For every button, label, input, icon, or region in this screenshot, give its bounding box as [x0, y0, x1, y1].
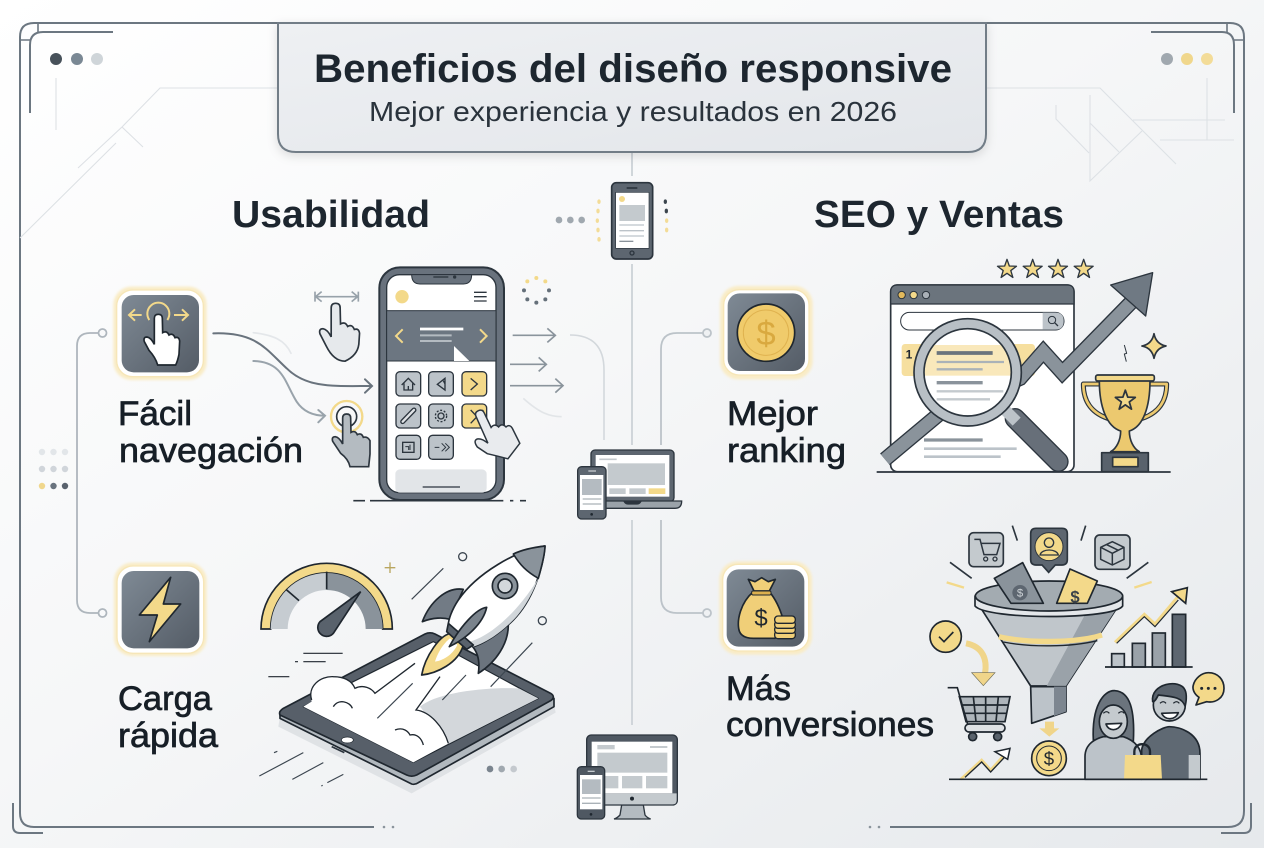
icon: top phone [556, 183, 668, 259]
connector: right bracket [661, 329, 711, 617]
coin output: $ [1044, 748, 1055, 769]
banknotes [994, 563, 1097, 607]
dot grid: left margin [39, 449, 68, 489]
label: Fácil navegación [118, 395, 303, 470]
arrows: out of phone [510, 328, 563, 417]
tablet [278, 633, 556, 793]
icon: touch navigation tile [113, 287, 207, 380]
coin output [1032, 722, 1066, 776]
label: Fácil navegación: Fácil [118, 395, 192, 433]
growth arrow [885, 273, 1153, 459]
ground line [877, 469, 1171, 474]
icon: money bag tile [719, 561, 812, 655]
banknotes: $ [1070, 588, 1080, 607]
ground line [949, 777, 1207, 782]
label: Mejor ranking [727, 395, 846, 470]
label: Fácil navegación: navegación [119, 432, 303, 470]
shopping cart [948, 688, 1010, 741]
icon: coin tile [720, 286, 813, 379]
label: Mejor ranking: Mejor [727, 395, 818, 433]
small trend arrow [961, 748, 1010, 779]
icon: desktop and phone [577, 735, 677, 819]
central divider line [631, 152, 633, 725]
browser window: 1 [906, 347, 913, 361]
connector: phone to laptop [570, 335, 604, 440]
funnel [975, 563, 1123, 723]
section: conversions illustration [930, 526, 1224, 779]
title panel [278, 23, 986, 152]
bar chart with trend [1105, 588, 1193, 667]
icon: box tile [1095, 535, 1130, 569]
banknotes: $ [1017, 588, 1024, 600]
icon: money bag tile: $ [754, 605, 768, 632]
label: Más conversiones [726, 670, 934, 744]
heading: Usabilidad: Usabilidad [232, 194, 430, 236]
exhaust clouds [303, 663, 448, 762]
loading spinner dots [522, 276, 551, 305]
section: speed illustration [114, 546, 556, 793]
title: Beneficios del diseño responsive [314, 47, 952, 91]
connector: left bracket [77, 329, 106, 617]
icon: user pin tile [1031, 528, 1067, 572]
speed lines [259, 553, 546, 786]
icon: swipe hand [315, 292, 360, 361]
rating stars [997, 259, 1093, 277]
button grid [396, 372, 487, 459]
label: Mejor ranking: ranking [727, 432, 846, 470]
arrows: flow from icon to phone [213, 333, 372, 422]
icon: laptop and phone [578, 450, 682, 519]
icon: coin tile: $ [756, 315, 776, 353]
label: Más conversiones: conversiones [726, 706, 934, 744]
rays [947, 526, 1152, 588]
label: Carga rápida [118, 680, 218, 755]
icon: lightning tile [114, 563, 207, 656]
subtitle: Mejor experiencia y resultados en 2026 [369, 96, 897, 127]
label: Carga rápida: rápida [118, 717, 218, 755]
trophy [1083, 334, 1167, 472]
corner dots: left [50, 53, 103, 65]
label: Carga rápida: Carga [118, 680, 212, 718]
section: navigation illustration [113, 267, 563, 501]
pagination dots [487, 766, 517, 772]
check badge with arrow [930, 621, 995, 686]
icon: cart tile [969, 533, 1003, 567]
icon: tap hand [331, 401, 370, 467]
magnifying glass [914, 319, 1058, 462]
customers [1085, 673, 1224, 779]
gauge [261, 562, 395, 677]
section: ranking illustration [720, 259, 1171, 472]
browser window [891, 285, 1074, 472]
phone mockup [353, 267, 526, 501]
rocket [422, 546, 545, 675]
label: Más conversiones: Más [726, 670, 791, 708]
heading: SEO y Ventas: SEO y Ventas [814, 194, 1064, 236]
corner dots: right [1161, 53, 1213, 65]
